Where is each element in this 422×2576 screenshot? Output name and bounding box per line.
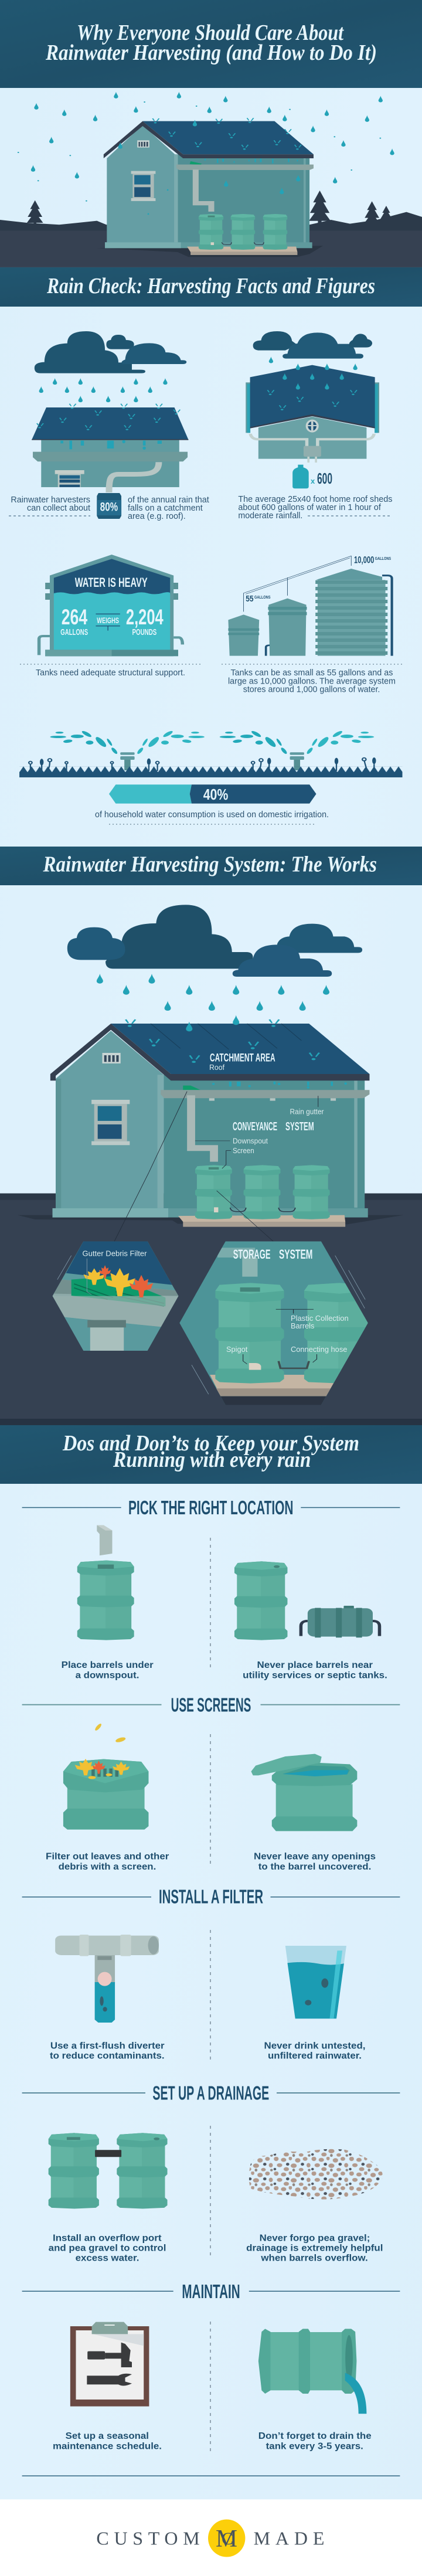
icon: clipboard with tools [70,2322,149,2407]
icon: tipped barrel draining [258,2329,366,2414]
heading: Dos and Don’ts to Keep your System [62,1431,359,1456]
tank figures [60,575,164,637]
panel: title header [0,0,422,88]
panel: hero illustration with house in rain [0,92,422,267]
labels: Downspout [233,1137,268,1146]
text block: Don’t forget to drain the [258,2431,372,2441]
icon: first-flush diverter [55,1935,159,2023]
text block: unfiltered rainwater. [268,2051,362,2061]
rain drops [18,92,394,215]
labels: Barrels [291,1321,315,1330]
multiplier: 600 [317,470,332,487]
panel: set up a drainage [22,2082,400,2264]
gallon labels [246,555,391,604]
text block: about 600 gallons of water in 1 hour of [238,503,382,512]
heading: SET UP A DRAINAGE [152,2082,269,2104]
icon: barrel under downspout [77,1525,134,1640]
text block: and pea gravel to control [49,2244,166,2254]
icon: tank [39,555,182,656]
icon: roof with gutters and clouds [246,331,379,488]
text block: Never leave any openings [254,1852,376,1862]
callout: gutter debris filter [51,1241,181,1351]
icon: glass of unfiltered water [285,1946,346,2018]
text block: drainage is extremely helpful [246,2244,383,2254]
icon: pea gravel [249,2149,383,2200]
labels: CATCHMENT AREA [210,1052,275,1065]
heading: PICK THE RIGHT LOCATION [128,1497,293,1518]
icon: sprinklers on lawn [19,730,403,777]
tank figures: WEIGHS [97,616,119,625]
labels: Spigot [226,1345,248,1354]
text block: The average 25x40 foot home roof sheds [238,495,392,504]
ground [0,1194,422,1425]
text block: Filter out leaves and other [46,1852,169,1862]
labels: Screen [233,1146,254,1155]
text block: area (e.g. roof). [128,512,186,521]
tank figures: GALLONS [60,627,88,637]
panel: maintain [22,2281,400,2476]
labels: STORAGE [233,1247,271,1262]
gallon labels: 55 [246,594,253,604]
text block: stores around 1,000 gallons of water. [243,685,380,695]
title: Rainwater Harvesting (and How to Do It) [45,40,377,65]
panel: footer logo [0,2499,422,2576]
text block: to the barrel uncovered. [258,1862,371,1872]
heading: INSTALL A FILTER [159,1886,263,1908]
icon: 80 percent barrel: 80% [100,501,118,514]
multiplier: x [311,477,315,485]
bar chart: 40 percent: 40% [203,786,228,803]
labels: Connecting hose [291,1345,347,1354]
logo wordmark right: MADE [254,2528,324,2549]
heading: MAINTAIN [182,2281,240,2302]
icon: 80 percent barrel [97,493,121,519]
text block: of household water consumption is used on domestic irrigation. [95,810,329,820]
tank figures: 2,204 [126,605,164,629]
logo wordmark left: CUSTOM [96,2528,200,2549]
text block: moderate rainfall. [238,511,302,521]
text block: Never place barrels near [257,1660,373,1670]
panel: system diagram [0,905,422,1425]
text block: Rainwater harvesters [11,495,90,505]
panel: catchment 80 percent fact [9,331,209,521]
text block: Never forgo pea gravel; [260,2233,370,2243]
icon: water jug [292,465,309,488]
gallon labels: 10,000 [354,555,374,566]
callout: storage system [178,1241,373,1406]
text block: excess water. [76,2254,139,2264]
illustration: clouds, rain and house [50,905,369,1218]
panel: install a filter [22,1886,400,2062]
labels: Roof [209,1063,224,1072]
text block: Set up a seasonal [66,2431,149,2441]
heading: USE SCREENS [171,1694,251,1715]
icon: barrel with open lid [251,1754,357,1831]
panel: facts and figures heading [0,267,422,307]
text block: can collect about [27,504,90,513]
text block: Install an overflow port [53,2233,162,2243]
text block: maintenance schedule. [53,2441,162,2451]
text block: large as 10,000 gallons. The average system [228,677,396,687]
text block: Never drink untested, [264,2041,366,2051]
text block: utility services or septic tanks. [243,1671,387,1681]
panel: dos and don'ts heading [0,1425,422,1484]
panel: the works heading [0,847,422,885]
text block: tank every 3-5 years. [266,2441,363,2451]
logo emblem: M [216,2526,237,2553]
text block: a downspout. [76,1671,139,1681]
text block: Place barrels under [62,1660,154,1670]
multiplier [311,470,332,487]
bar chart: 40 percent [109,784,316,804]
labels: Plastic Collection [291,1314,349,1323]
icon: barrel beside septic tank [234,1561,379,1640]
tank figures: POUNDS [132,627,156,637]
icon: clouds, rain and house [32,331,188,492]
barrels and platform [114,1165,345,1241]
labels: SYSTEM [279,1247,312,1262]
text block: debris with a screen. [59,1862,156,1872]
labels: Gutter Debris Filter [82,1249,147,1258]
icon: barrel with screen and leaves [63,1723,148,1830]
text block: Tanks need adequate structural support. [36,668,185,678]
labels: SYSTEM [285,1120,314,1133]
title: Why Everyone Should Care About [77,21,344,45]
labels: Rain gutter [290,1107,324,1116]
text block: of the annual rain that [128,495,209,505]
panel: water is heavy tank [20,555,200,678]
icon: three storage tanks [228,556,392,656]
panel: use screens [22,1694,400,1872]
gallon labels: GALLONS [375,557,391,561]
heading: Rainwater Harvesting System: The Works [43,852,377,877]
text block: Tanks can be as small as 55 gallons and as [231,668,393,678]
house [104,121,314,248]
logo emblem [208,2520,245,2557]
panel: tank size comparison [222,555,402,695]
tank figures: WATER IS HEAVY [75,575,148,590]
rain barrels [187,214,297,255]
panel: pick the right location [22,1497,400,1681]
tank figures: 264 [62,605,88,629]
text block: when barrels overflow. [260,2254,368,2264]
labels [82,1052,349,1354]
hills and ground [0,191,422,267]
logo emblem: C [222,2529,233,2548]
panel: 600 gallons fact [238,331,392,521]
gallon labels: GALLONS [254,596,271,600]
text block: to reduce contaminants. [50,2051,165,2061]
panel: irrigation fact [19,730,403,824]
text block: Use a first-flush diverter [50,2041,165,2051]
text block: falls on a catchment [128,504,203,513]
labels: CONVEYANCE [233,1120,277,1133]
heading: Running with every rain [113,1447,311,1472]
icon: connected barrels [49,2133,168,2208]
